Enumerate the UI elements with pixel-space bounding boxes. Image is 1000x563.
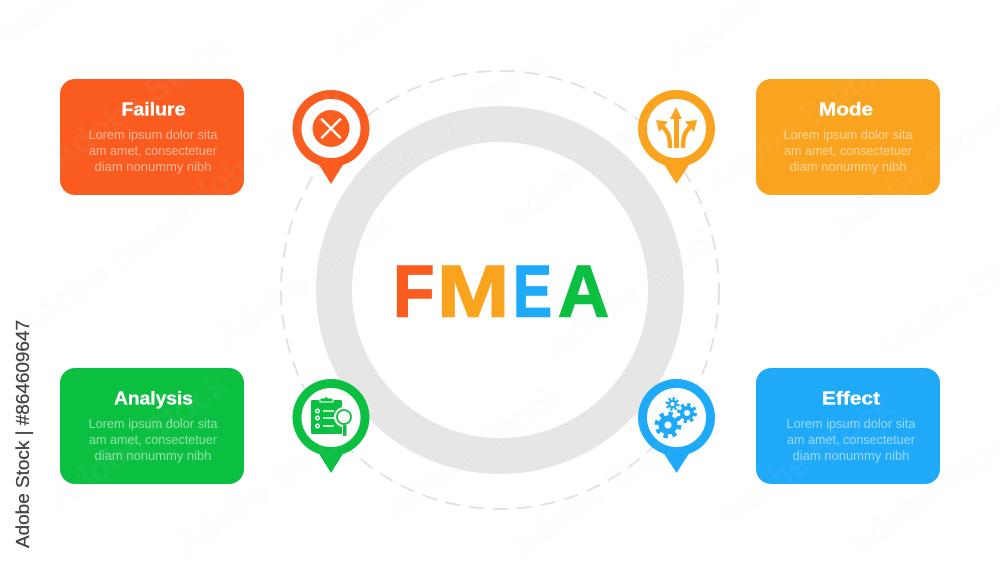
title: FMEA: A — [558, 252, 609, 333]
panel: Analysis: diam nonummy nibh — [94, 448, 212, 463]
panel: Failure: Failure — [122, 100, 186, 120]
watermark pattern: Adobe Stock — [503, 416, 695, 563]
watermark pattern: Adobe Stock — [168, 414, 360, 563]
icon: failure pin with cross — [297, 94, 365, 184]
watermark pattern: Adobe Stock — [708, 386, 900, 537]
panel: Analysis: Analysis — [114, 388, 193, 408]
credit: vertical stock id: Adobe Stock | #864609647 — [13, 320, 33, 548]
watermark pattern: Adobe Stock — [538, 216, 730, 367]
panel: Mode: Mode — [819, 100, 873, 120]
panel: Analysis: am amet, consectetuer — [89, 432, 218, 447]
panel: Effect: Effect — [822, 388, 880, 408]
title: FMEA: F — [393, 250, 434, 332]
panel: Mode — [756, 79, 940, 195]
title: FMEA: M — [437, 251, 509, 333]
watermark pattern: Adobe Stock — [8, 196, 200, 347]
panel: Mode: am amet, consectetuer — [784, 143, 913, 158]
panel: Failure: diam nonummy nibh — [94, 159, 212, 174]
panel: Failure — [60, 79, 244, 195]
watermark pattern: Adobe Stock — [163, 81, 355, 232]
icon: effect pin with gears — [642, 384, 710, 473]
panel: Effect: Lorem ipsum dolor sita — [786, 416, 916, 431]
panel: Failure: Lorem ipsum dolor sita — [88, 127, 218, 142]
panel: Effect — [756, 368, 940, 484]
panel: Analysis — [60, 368, 244, 484]
panel: Failure: am amet, consectetuer — [89, 143, 218, 158]
watermark pattern: Adobe Stock — [698, 51, 890, 202]
central grey ring — [334, 124, 666, 456]
watermark pattern: Adobe Stock — [208, 206, 400, 357]
watermark pattern: Adobe Stock — [43, 366, 235, 517]
icon: mode pin with diverging arrows — [642, 94, 710, 184]
watermark pattern: Adobe Stock — [43, 26, 235, 177]
panel: Mode: Lorem ipsum dolor sita — [784, 127, 913, 142]
icon: analysis pin with clipboard and magnifier — [297, 384, 365, 473]
watermark pattern: Adobe Stock — [368, 41, 560, 192]
panel: Mode: diam nonummy nibh — [790, 159, 906, 174]
dashed orbit circle — [281, 71, 719, 509]
watermark pattern: Adobe Stock — [378, 376, 570, 527]
watermark pattern: Adobe Stock — [493, 88, 685, 239]
panel: Effect: diam nonummy nibh — [792, 448, 910, 463]
panel: Analysis: Lorem ipsum dolor sita — [88, 416, 218, 431]
title: FMEA: E — [513, 251, 552, 333]
panel: Effect: am amet, consectetuer — [787, 432, 916, 447]
title: FMEA — [393, 250, 609, 333]
